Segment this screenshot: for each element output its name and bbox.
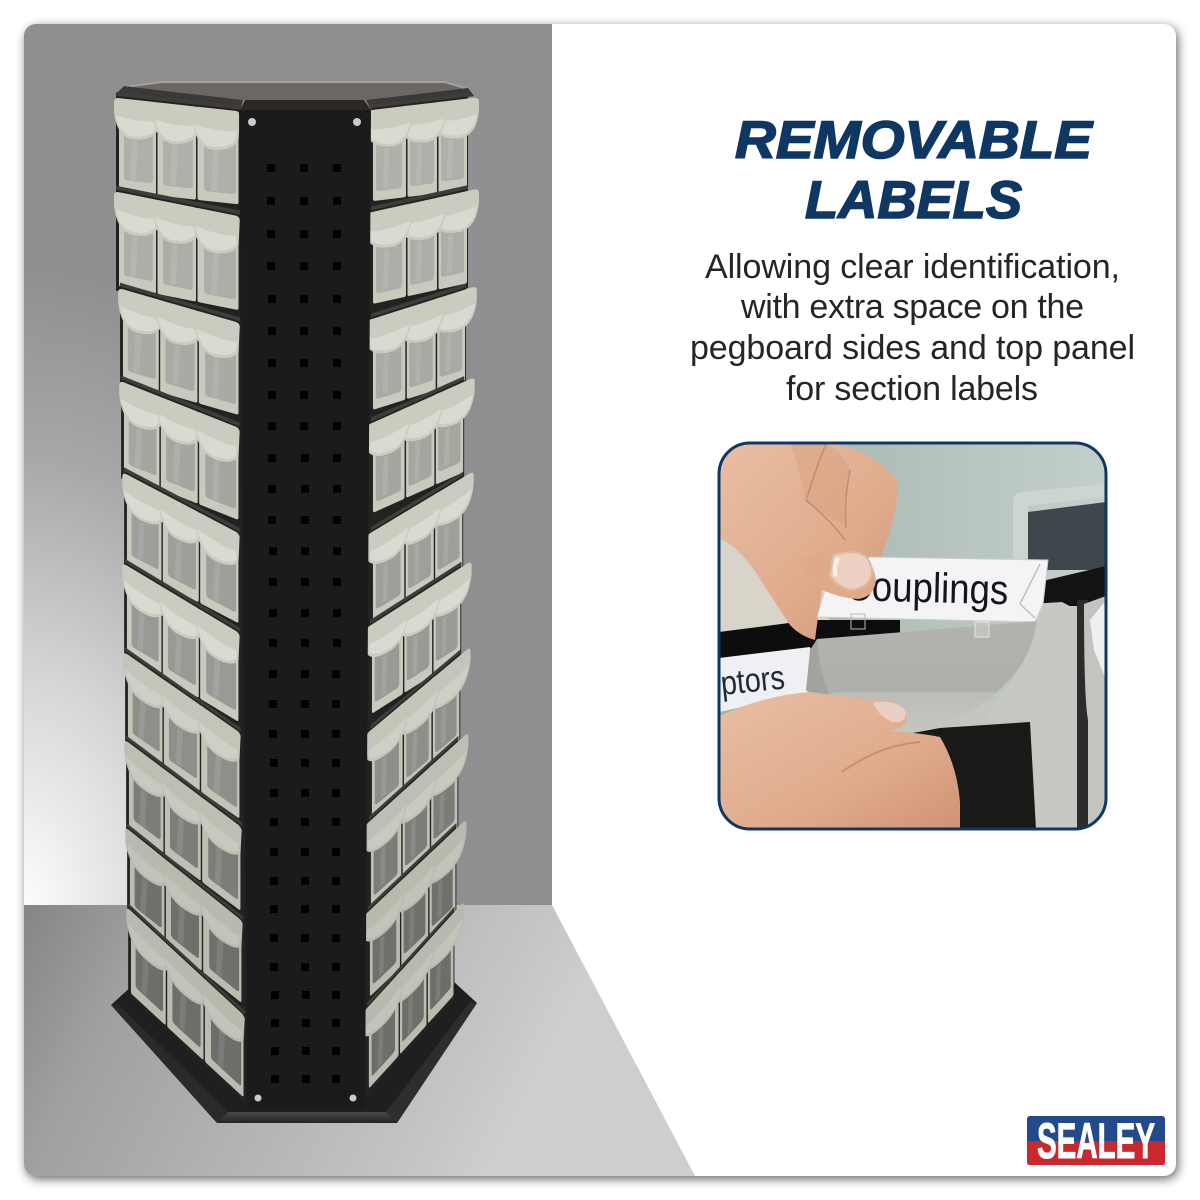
Couplings label: Couplings xyxy=(845,562,1009,613)
description text: with extra space on the xyxy=(740,288,1084,326)
description text: pegboard sides and top panel xyxy=(690,329,1135,367)
black rail strips xyxy=(719,566,1106,660)
photo panel: product scene xyxy=(24,24,695,1176)
tower top panel xyxy=(118,81,474,112)
wall xyxy=(24,24,552,914)
inset photo border xyxy=(719,443,1106,829)
drawer body xyxy=(891,596,1104,828)
right face drawers xyxy=(363,91,479,1099)
dark body behind drawers xyxy=(214,109,430,984)
inset photo: removing a label xyxy=(719,443,1106,830)
description text: Allowing clear identification, xyxy=(705,248,1120,286)
heading: REMOVABLE xyxy=(735,111,1094,170)
description text xyxy=(690,248,1135,408)
grey lid xyxy=(806,621,1037,700)
lower drawer label: ptors xyxy=(719,658,786,703)
photo background xyxy=(720,444,1104,716)
Couplings label xyxy=(817,557,1048,629)
tower base xyxy=(111,981,477,1123)
heading: LABELS xyxy=(805,171,1022,230)
thumb holding label xyxy=(822,551,876,599)
heading xyxy=(735,111,1094,230)
floor xyxy=(24,905,695,1176)
description text: for section labels xyxy=(786,370,1038,408)
left face drawers xyxy=(114,92,245,1103)
upper hand xyxy=(719,443,898,640)
rotating storage tower xyxy=(111,81,479,1123)
lower drawer label xyxy=(719,647,810,712)
pegboard panel xyxy=(239,110,371,1109)
lower hand xyxy=(719,692,960,830)
